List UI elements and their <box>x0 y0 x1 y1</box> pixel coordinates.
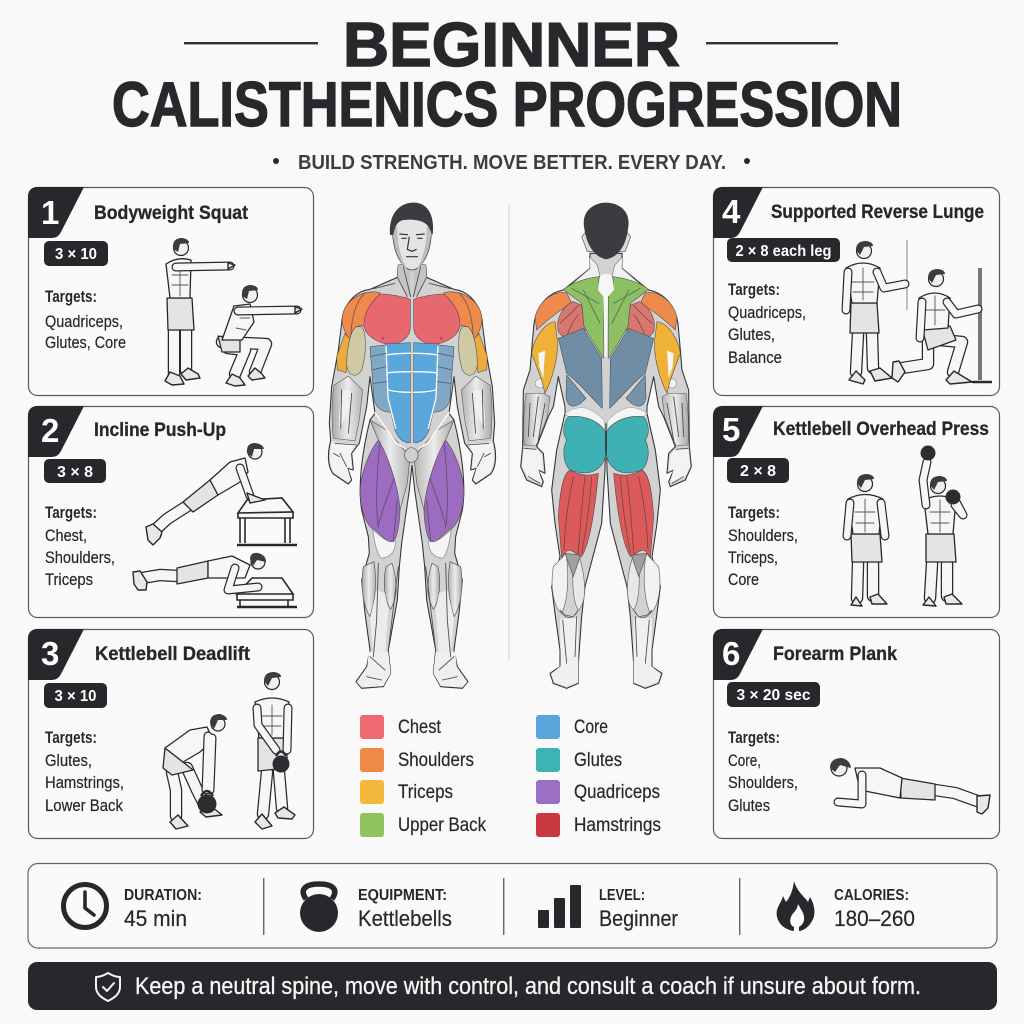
panel: step 5 kettlebell overhead press: 5 <box>722 411 740 448</box>
panel: step 5 kettlebell overhead press: 2 × 8 <box>740 463 776 480</box>
panel: workout stats <box>28 864 997 948</box>
panel: step 6 forearm plank: Core, <box>728 752 761 770</box>
stat: level: LEVEL: <box>599 887 645 904</box>
panel: step 2 incline push-up: Incline Push-Up <box>94 420 226 441</box>
legend item: upper back <box>360 813 486 837</box>
panel: step 5 kettlebell overhead press: Core <box>728 571 759 589</box>
legend item: hamstrings: Hamstrings <box>574 815 661 836</box>
panel: step 1 bodyweight squat: Targets: <box>45 288 97 306</box>
panel: step 4 supported reverse lunge: Balance <box>728 349 782 367</box>
title: BEGINNER <box>343 11 680 80</box>
panel: step 5 kettlebell overhead press: Targets: <box>728 504 780 522</box>
panel: step 3 kettlebell deadlift <box>28 629 314 838</box>
panel: step 6 forearm plank: Shoulders, <box>728 774 798 792</box>
panel: step 5 kettlebell overhead press <box>713 406 1000 618</box>
icon: standing figure <box>847 474 887 606</box>
stat: duration: 45 min <box>124 906 187 931</box>
panel: step 6 forearm plank: Glutes <box>728 797 770 815</box>
anatomy figure: back view <box>521 203 691 688</box>
icon: forearm plank figure <box>830 758 990 814</box>
panel: step 4 supported reverse lunge: Supported Reverse Lunge <box>771 202 984 223</box>
panel: step 4 supported reverse lunge: 4 <box>722 193 741 230</box>
legend item: triceps: Triceps <box>398 782 453 803</box>
legend item: shoulders <box>360 748 474 772</box>
panel: step 4 supported reverse lunge <box>713 187 1000 396</box>
panel: step 4 supported reverse lunge: Targets: <box>728 281 780 299</box>
legend item: quadriceps <box>536 780 660 804</box>
stat: calories <box>834 887 915 931</box>
icon: standing figure, arms forward <box>165 238 235 385</box>
panel: step 3 kettlebell deadlift: 3 <box>41 635 59 672</box>
anatomy figure: front view <box>328 203 496 688</box>
panel: step 3 kettlebell deadlift: 3 × 10 <box>54 688 96 705</box>
stat: level <box>599 887 678 931</box>
icon: figure pressing kettlebell overhead <box>920 446 963 606</box>
panel: step 3 kettlebell deadlift: Targets: <box>45 729 97 747</box>
icon: incline push-up figure on box <box>146 443 297 545</box>
stat: equipment: EQUIPMENT: <box>358 887 447 904</box>
legend: muscle groups <box>360 715 661 837</box>
legend item: triceps <box>360 780 453 804</box>
legend item: shoulders: Shoulders <box>398 750 474 771</box>
panel: step 1 bodyweight squat: Bodyweight Squat <box>94 203 249 224</box>
stat: duration: DURATION: <box>124 887 202 904</box>
icon: squat figure <box>218 285 302 386</box>
panel: step 2 incline push-up: Chest, <box>45 527 87 545</box>
panel: step 2 incline push-up: Shoulders, <box>45 549 115 567</box>
legend item: quadriceps: Quadriceps <box>574 782 660 803</box>
panel: step 4 supported reverse lunge: Quadriceps, <box>728 304 806 322</box>
stat: equipment <box>358 887 452 931</box>
panel: step 6 forearm plank: 3 × 20 sec <box>736 687 811 704</box>
stat: level: Beginner <box>599 906 678 931</box>
legend item: hamstrings <box>536 813 661 837</box>
panel: step 6 forearm plank: 6 <box>722 635 740 672</box>
legend item: core <box>536 715 608 739</box>
safety banner <box>28 962 997 1010</box>
stat: calories: 180–260 <box>834 906 915 931</box>
icon: lunge figure at pole <box>892 268 992 384</box>
panel: step 1 bodyweight squat: Quadriceps, <box>45 313 123 331</box>
title <box>112 11 902 140</box>
panel: step 1 bodyweight squat <box>28 187 314 396</box>
subtitle: BUILD STRENGTH. MOVE BETTER. EVERY DAY. <box>298 152 726 174</box>
panel: step 2 incline push-up: 3 × 8 <box>57 464 93 481</box>
panel: step 6 forearm plank: Targets: <box>728 729 780 747</box>
icon: standing figure holding pole <box>846 240 907 384</box>
icon: clock <box>64 884 106 928</box>
legend item: glutes <box>536 748 622 772</box>
legend item: upper back: Upper Back <box>398 815 486 836</box>
panel: step 5 kettlebell overhead press: Triceps, <box>728 549 778 567</box>
stat: equipment: Kettlebells <box>358 906 452 931</box>
safety banner: Keep a neutral spine, move with control, and consult a coach if unsure about form. <box>135 973 921 1000</box>
panel: step 1 bodyweight squat: 3 × 10 <box>55 246 97 263</box>
icon: level bars <box>538 885 581 928</box>
legend item: core: Core <box>574 717 608 738</box>
panel: step 3 kettlebell deadlift: Glutes, <box>45 752 92 770</box>
panel: step 5 kettlebell overhead press: Shoulders, <box>728 527 798 545</box>
panel: step 2 incline push-up <box>28 406 314 618</box>
panel: step 3 kettlebell deadlift: Hamstrings, <box>45 774 124 792</box>
panel: step 1 bodyweight squat: 1 <box>41 194 59 231</box>
legend item: chest <box>360 715 442 739</box>
panel: step 6 forearm plank: Forearm Plank <box>773 644 897 665</box>
panel: step 2 incline push-up: Triceps <box>45 571 93 589</box>
panel: step 3 kettlebell deadlift: Lower Back <box>45 797 124 815</box>
stat: duration <box>124 887 202 931</box>
panel: step 2 incline push-up: Targets: <box>45 504 97 522</box>
panel: step 4 supported reverse lunge: Glutes, <box>728 326 775 344</box>
panel: step 3 kettlebell deadlift: Kettlebell Deadlift <box>95 644 251 665</box>
stat: calories: CALORIES: <box>834 887 909 904</box>
icon: low plank figure on box <box>133 553 297 607</box>
panel: step 6 forearm plank <box>713 629 1000 838</box>
panel: step 4 supported reverse lunge: 2 × 8 each leg <box>736 243 832 260</box>
panel: step 2 incline push-up: 2 <box>41 412 59 449</box>
divider between body views <box>508 205 510 660</box>
icon: kettlebell <box>300 884 338 932</box>
icon: standing deadlift figure with kettlebell <box>255 672 295 829</box>
icon: flame <box>777 881 814 931</box>
legend item: glutes: Glutes <box>574 750 622 771</box>
icon: bent deadlift figure with kettlebell <box>163 714 227 829</box>
legend item: chest: Chest <box>398 717 442 738</box>
panel: step 1 bodyweight squat: Glutes, Core <box>45 334 126 352</box>
panel: step 5 kettlebell overhead press: Kettlebell Overhead Press <box>773 419 989 440</box>
icon: shield check <box>96 973 120 1001</box>
